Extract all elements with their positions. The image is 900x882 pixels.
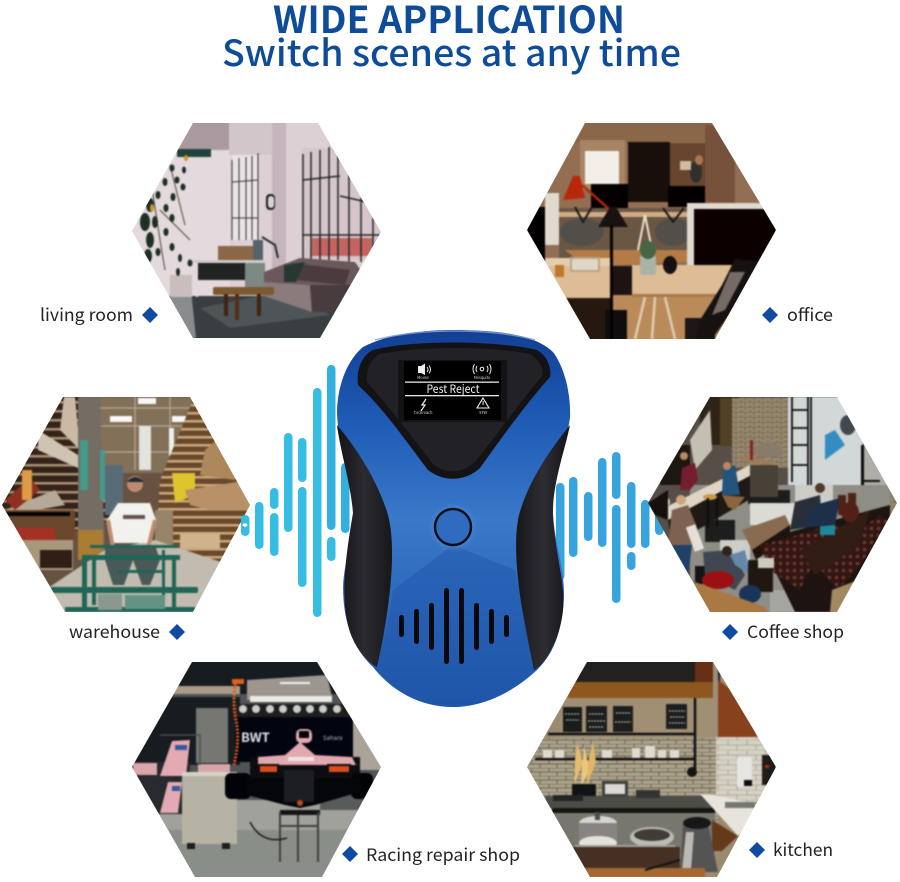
icon: speaker [418, 364, 430, 375]
body silhouette [337, 330, 570, 707]
ice cream cones [574, 743, 583, 786]
window: middle [232, 153, 258, 240]
kettle [680, 817, 718, 872]
front wings on rack [133, 735, 230, 813]
sound wave: right [556, 452, 664, 603]
race car [225, 729, 373, 815]
floor [158, 799, 358, 831]
seating area dark base [776, 504, 891, 612]
desk [197, 262, 246, 281]
display: Mosquito [474, 375, 491, 381]
tool cabinet [182, 772, 237, 844]
desks [545, 261, 611, 299]
label: racing repair shop: Racing repair shop [366, 841, 520, 866]
product: pest repeller device [337, 330, 570, 707]
label: warehouse: warehouse [69, 618, 160, 643]
sofa [264, 257, 360, 286]
floor [50, 539, 220, 612]
title [222, 0, 681, 77]
cups on shelf [543, 746, 679, 758]
sound wave: left [241, 365, 350, 617]
floor [168, 295, 336, 338]
windows [788, 397, 863, 485]
photo: office [520, 120, 782, 346]
window: right [302, 147, 382, 262]
upper dark window panel [358, 342, 550, 479]
monitors [591, 184, 628, 208]
photo: racing repair shop [130, 660, 385, 880]
label: kitchen: kitchen [773, 836, 833, 861]
coffee table [213, 287, 274, 295]
label: living room: living room [40, 301, 133, 326]
banner [235, 717, 353, 762]
display: Mouse [417, 376, 429, 381]
base [573, 847, 680, 877]
steel bowl [630, 827, 674, 847]
photo: racing repair shop: BWT [241, 727, 270, 746]
icon: waves [473, 364, 491, 374]
chalkboards [563, 704, 687, 732]
display: Pest Reject [426, 381, 480, 397]
photo: living room [130, 120, 385, 340]
display: STW [479, 411, 488, 416]
photo: coffee shop [645, 395, 900, 615]
chair person [703, 550, 745, 590]
label: office [762, 301, 833, 326]
label: office: office [787, 301, 833, 326]
checker floor [690, 485, 890, 615]
plant leaves [150, 165, 190, 270]
top highlight [375, 331, 535, 340]
lower blue facet [377, 545, 534, 707]
counter [545, 796, 715, 808]
red lamp [563, 176, 585, 200]
power button [427, 501, 479, 553]
right shelves [157, 401, 237, 562]
chair [700, 259, 758, 336]
stand [280, 812, 318, 862]
shelf pipes [535, 698, 695, 770]
standing woman [668, 505, 698, 550]
overhead panel [247, 675, 332, 700]
pot [579, 812, 617, 850]
right white counter [700, 794, 760, 836]
bags and floor table [702, 571, 734, 589]
photo: kitchen [525, 660, 780, 880]
black side: left [337, 425, 392, 667]
long counter [667, 464, 751, 520]
photo: racing repair shop: Sahara [323, 733, 343, 742]
sofas [760, 525, 839, 590]
cart [50, 545, 198, 612]
display [398, 360, 507, 422]
label: coffee shop: Coffee shop [747, 618, 844, 643]
subtitle: Switch scenes at any time [222, 25, 681, 77]
photo: warehouse [0, 395, 255, 615]
icon: warning [477, 398, 489, 408]
white tile wall [716, 737, 778, 802]
table [742, 515, 790, 550]
person [105, 476, 160, 585]
black side: right [516, 425, 570, 670]
orange cable [234, 680, 238, 765]
icon: cockroach [421, 399, 426, 411]
display: Cockroach [414, 410, 432, 416]
left shelves [0, 395, 110, 540]
speaker slots [399, 588, 509, 664]
